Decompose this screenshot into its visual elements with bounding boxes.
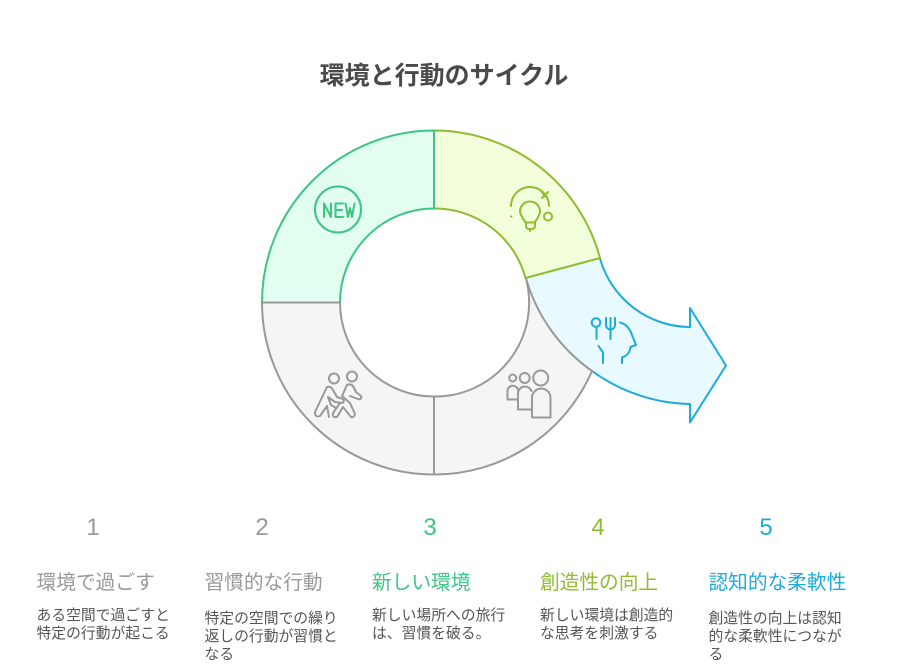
step 3 number: 3 (423, 514, 437, 541)
step 1 text: 特定の行動が起こる (36, 626, 170, 642)
segment: new environment (green) (262, 130, 434, 302)
segment: group of people (gray lower right) (434, 278, 592, 475)
step 2 heading: 習慣的な行動 (204, 572, 323, 594)
step 4 text: 新しい環境は創造的 (540, 608, 673, 624)
step 5 text: 的な柔軟性につなが (708, 629, 842, 645)
segment: walking people (gray lower left) (262, 302, 434, 474)
step 5 text: る (708, 647, 723, 663)
step 5 text: 創造性の向上は認知 (708, 611, 842, 627)
icon: group of people (508, 370, 550, 418)
step 2 text: 特定の空間での繰り (204, 611, 338, 627)
step 4 text: な思考を刺激する (540, 626, 658, 642)
step 3 text: は、習慣を破る。 (372, 626, 490, 642)
step 3 heading: 新しい環境 (372, 572, 470, 594)
icon: head with fork and spoon (592, 318, 636, 363)
step 3 text: 新しい場所への旅行 (372, 608, 505, 624)
segment: cognitive flexibility arrow (blue) (526, 258, 726, 422)
step 5 heading: 認知的な柔軟性 (708, 572, 846, 594)
step 3 text (372, 607, 505, 642)
step 2 text: 返しの行動が習慣と (204, 629, 338, 645)
step 5 text (708, 610, 842, 663)
icon: NEW badge (315, 186, 361, 232)
segment: creativity (lime) (434, 130, 600, 278)
step 4 text (540, 607, 673, 642)
step 4 number: 4 (591, 514, 605, 541)
step 1 text (36, 607, 170, 642)
step 2 number: 2 (255, 514, 269, 541)
step 5 number: 5 (759, 514, 773, 541)
step 4 heading: 創造性の向上 (540, 572, 658, 594)
icon: light bulb (511, 187, 552, 231)
title: 環境と行動のサイクル (320, 62, 568, 90)
step 2 text: なる (204, 647, 234, 663)
step 1 text: ある空間で過ごすと (36, 608, 170, 624)
step 1 heading: 環境で過ごす (36, 572, 155, 594)
step 2 text (204, 610, 338, 663)
step 1 number: 1 (86, 514, 100, 541)
icon: walking pair (315, 372, 361, 417)
